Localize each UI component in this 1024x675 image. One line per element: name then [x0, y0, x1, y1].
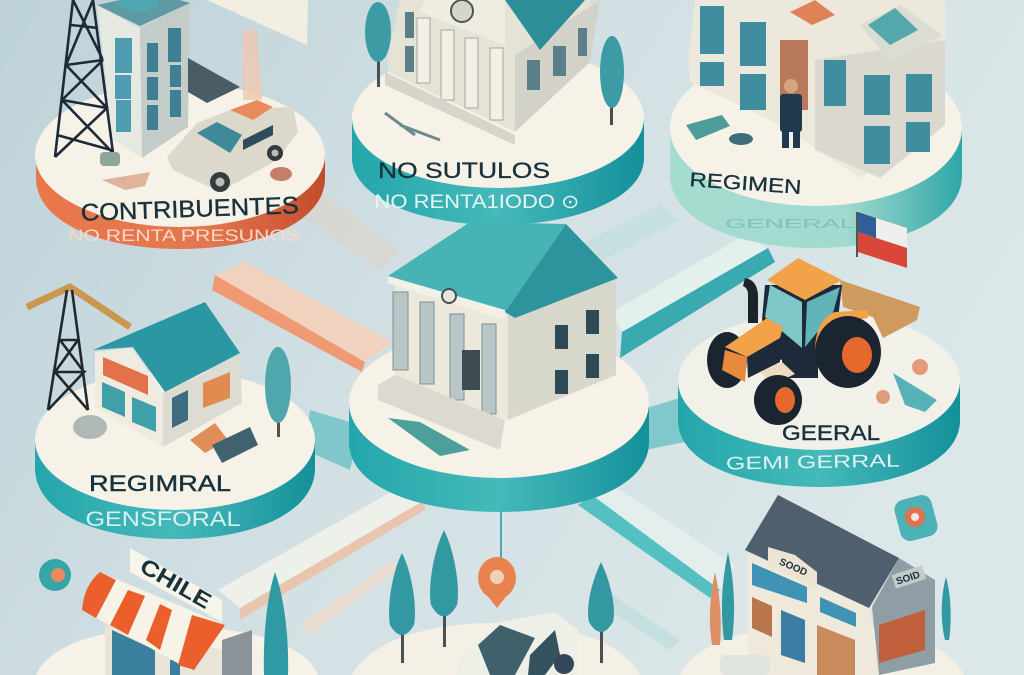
label: gemi gerral: GEMI GERRAL — [726, 450, 900, 474]
panel: regimen general mid-left — [27, 287, 315, 539]
small objects — [893, 373, 937, 412]
sign board — [207, 0, 308, 45]
connectors between platforms — [212, 170, 775, 650]
icon: store with teal roof — [93, 302, 242, 447]
label: gensforal: GENSFORAL — [86, 508, 240, 531]
panel: bottom-middle car — [352, 530, 640, 675]
icon: trees — [365, 2, 624, 125]
panel: no sujetos — [352, 0, 644, 225]
panel: central government building — [349, 222, 649, 512]
faded band text: GENERAL — [725, 216, 855, 231]
label: regimral: REGIMRAL — [89, 471, 231, 496]
panel: general mid-right — [678, 258, 960, 487]
icon: trees — [389, 530, 614, 663]
panel: regimen — [670, 0, 962, 268]
small objects — [686, 115, 730, 140]
label: contribuyentes: CONTRIBUENTES — [80, 192, 299, 227]
icon: warehouse — [745, 495, 935, 675]
platform — [680, 625, 964, 675]
icon: central building — [378, 222, 618, 456]
label: chile sign: CHILE — [136, 553, 216, 614]
platform — [352, 623, 640, 675]
panel: contribuyentes no renta presunta — [35, 0, 325, 249]
platform — [349, 405, 649, 512]
icon: floating badge — [39, 559, 71, 591]
icon: person in suit — [780, 79, 802, 148]
label: general: GEERAL — [782, 422, 880, 445]
icon: tractor — [707, 258, 920, 425]
icon: government building — [385, 0, 600, 145]
icon: crane tower — [27, 287, 130, 410]
label: no renta presuntos: NO RENTA PRESUNOS — [68, 226, 300, 245]
label: store sign: SOOD — [777, 557, 809, 579]
icon: shop with striped awning — [82, 548, 252, 675]
icon: transmission tower — [55, 0, 113, 157]
platform — [36, 627, 318, 675]
icon: tree — [264, 572, 288, 675]
icon: solar panel — [188, 58, 240, 103]
icon: car — [720, 655, 770, 675]
platform — [670, 130, 962, 248]
label: no rentamodo: NO RENTA1IODO ⊙ — [374, 192, 580, 213]
icon: car — [457, 612, 578, 675]
small tools — [385, 113, 440, 140]
platform — [36, 155, 325, 249]
icon: office building — [97, 0, 190, 158]
icon: chile flag — [856, 212, 907, 268]
small objects — [270, 167, 292, 181]
platform — [678, 381, 960, 487]
panel: bottom-right warehouse shop — [680, 495, 964, 675]
icon: map pin — [478, 557, 516, 608]
icon: car — [167, 100, 298, 192]
icon: floating camera badge — [892, 493, 940, 543]
label: no sujetos: NO SUTULOS — [378, 158, 550, 183]
icon: small machines — [73, 415, 258, 463]
icon: tree — [265, 347, 291, 437]
label: regimen: REGIMEN — [689, 169, 802, 199]
platform — [35, 440, 315, 539]
icon: trees — [710, 552, 951, 645]
icon: commercial building — [688, 0, 945, 178]
label: side store sign: SOID — [895, 570, 922, 588]
panel: bottom-left shop — [36, 548, 318, 675]
platform — [352, 120, 644, 225]
